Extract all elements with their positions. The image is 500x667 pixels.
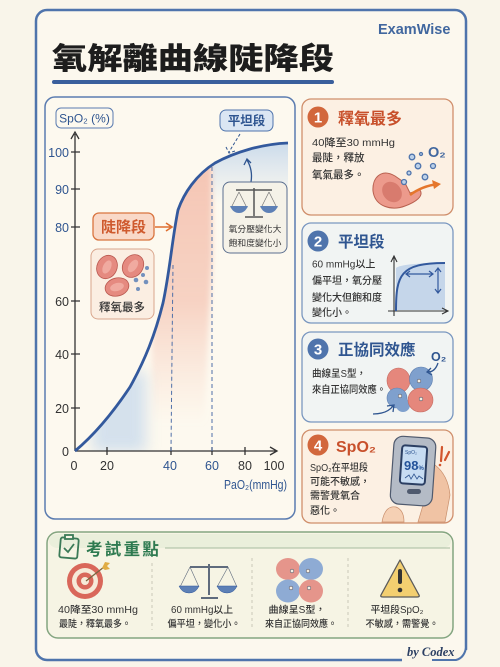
icon: balance <box>179 564 237 598</box>
card 4 text: 需警覺氧合 <box>310 489 360 502</box>
x axis ticks: 100 <box>264 459 284 473</box>
balance callout: 飽和度變化小 <box>229 237 282 248</box>
label: plateau <box>220 110 273 153</box>
icon: pulse oximeter: SpO₂ <box>405 450 417 456</box>
y axis ticks: 80 <box>55 221 69 235</box>
number badge 3: 3 <box>314 342 322 358</box>
icon: red blood cell releasing oxygen <box>373 145 446 208</box>
key point 1: 最陡，釋氧最多。 <box>59 617 131 630</box>
brand: ExamWise: ExamWise <box>378 22 450 38</box>
y axis label: SpO₂ (%) <box>59 112 110 126</box>
x axis label: PaO₂(mmHg) <box>224 478 287 492</box>
card 2 text: 60 mmHg以上 <box>312 258 375 270</box>
number badge 1 <box>308 106 328 128</box>
icon: hemoglobin subunits <box>373 350 446 414</box>
y axis label <box>56 108 113 128</box>
card 2: plateau <box>302 223 453 323</box>
y axis ticks: 90 <box>55 183 69 197</box>
card 2 text: 偏平坦，氧分壓 <box>312 274 382 287</box>
x axis ticks: 80 <box>238 459 252 473</box>
number badge 3 <box>308 338 328 360</box>
x axis ticks: 40 <box>163 459 177 473</box>
key point 2: 偏平坦，變化小。 <box>168 617 240 630</box>
card 2 text: 變化小。 <box>312 306 352 319</box>
icon: pulse oximeter: 98% <box>404 458 424 473</box>
icon: pulse oximeter <box>382 436 450 522</box>
card 1: maximum oxygen release <box>302 99 453 215</box>
icon: mini plateau chart <box>388 256 448 316</box>
panel: oxygen dissociation curve chart <box>45 97 295 519</box>
card 3 heading: 正協同效應 <box>338 340 416 359</box>
key point 1 <box>58 562 138 630</box>
y axis ticks: 20 <box>55 402 69 416</box>
icon: clipboard check <box>59 535 79 559</box>
y axis ticks: 60 <box>55 295 69 309</box>
key point 4: 平坦段SpO₂ <box>370 603 424 616</box>
card 3 text: 曲線呈S型， <box>312 367 366 380</box>
key point 2: 60 mmHg以上 <box>171 604 233 616</box>
number badge 2 <box>308 230 328 252</box>
key point 3: 曲線呈S型， <box>268 603 326 616</box>
card 2 heading: 平坦段 <box>338 232 385 251</box>
column dividers <box>152 558 348 630</box>
y axis ticks: 0 <box>62 445 69 459</box>
key point 1: 40降至30 mmHg <box>58 603 138 616</box>
title underline <box>52 80 334 84</box>
label: steep segment: 陡降段 <box>101 218 146 236</box>
card 2 text <box>312 258 382 319</box>
red blood cells callout <box>91 249 154 319</box>
icon: hemoglobin subunits: O₂ <box>431 350 446 364</box>
card 4 text <box>310 461 370 517</box>
dashed guides at 40 and 60 <box>171 165 212 451</box>
panel: exam key points <box>47 532 453 638</box>
title: 氧解離曲線陡降段 <box>52 42 334 76</box>
card 4 heading: SpO₂ <box>336 439 376 456</box>
card 1 text <box>312 136 395 181</box>
label: steep segment <box>93 213 172 240</box>
icon: warning triangle <box>381 560 419 597</box>
icon: red blood cell releasing oxygen: O₂ <box>428 145 446 161</box>
y axis ticks <box>48 146 69 459</box>
key point 4 <box>366 560 438 630</box>
x axis ticks: 0 <box>71 459 78 473</box>
card 1 text: 40降至30 mmHg <box>312 136 395 149</box>
card 1 heading: 釋氧最多 <box>338 109 402 128</box>
card 4: SpO2 <box>302 430 453 523</box>
number badge 4: 4 <box>314 438 323 454</box>
red blood cells callout: 釋氧最多 <box>99 300 145 314</box>
label: plateau: 平坦段 <box>228 113 266 128</box>
number badge 4 <box>308 434 328 456</box>
key point 2 <box>168 564 240 630</box>
key point 4: 不敏感，需警覺。 <box>366 617 438 630</box>
number badge 2: 2 <box>314 234 322 250</box>
number badge 1: 1 <box>314 110 322 126</box>
axes <box>71 132 277 455</box>
y axis ticks: 100 <box>48 146 69 160</box>
key point 3: 來自正協同效應。 <box>265 617 337 630</box>
balance callout: 氧分壓變化大 <box>229 223 282 234</box>
x axis ticks: 60 <box>205 459 219 473</box>
icon: hemoglobin subunits <box>276 558 323 602</box>
card 1 text: 最陡，釋放 <box>312 151 365 164</box>
signature: by Codex <box>407 645 455 659</box>
icon: target <box>67 562 110 599</box>
oxygen curve <box>75 143 288 451</box>
section heading: 考試重點 <box>86 539 161 559</box>
card 2 text: 變化大但飽和度 <box>312 291 382 304</box>
card 1 text: 氧氣最多。 <box>312 168 364 181</box>
card 3: positive cooperativity <box>302 332 453 422</box>
card 3 text <box>312 367 386 396</box>
x axis ticks: 20 <box>100 459 114 473</box>
curve area shading <box>92 120 293 452</box>
y axis ticks: 40 <box>55 348 69 362</box>
card 3 text: 來自正協同效應。 <box>312 383 386 396</box>
signature <box>402 645 468 663</box>
key point 3 <box>265 558 337 630</box>
card 4 text: 可能不敏感， <box>310 475 370 488</box>
x axis ticks <box>71 459 284 473</box>
balance callout <box>223 159 287 253</box>
card 4 text: SpO₂在平坦段 <box>310 461 368 474</box>
card 4 text: 惡化。 <box>310 504 340 517</box>
